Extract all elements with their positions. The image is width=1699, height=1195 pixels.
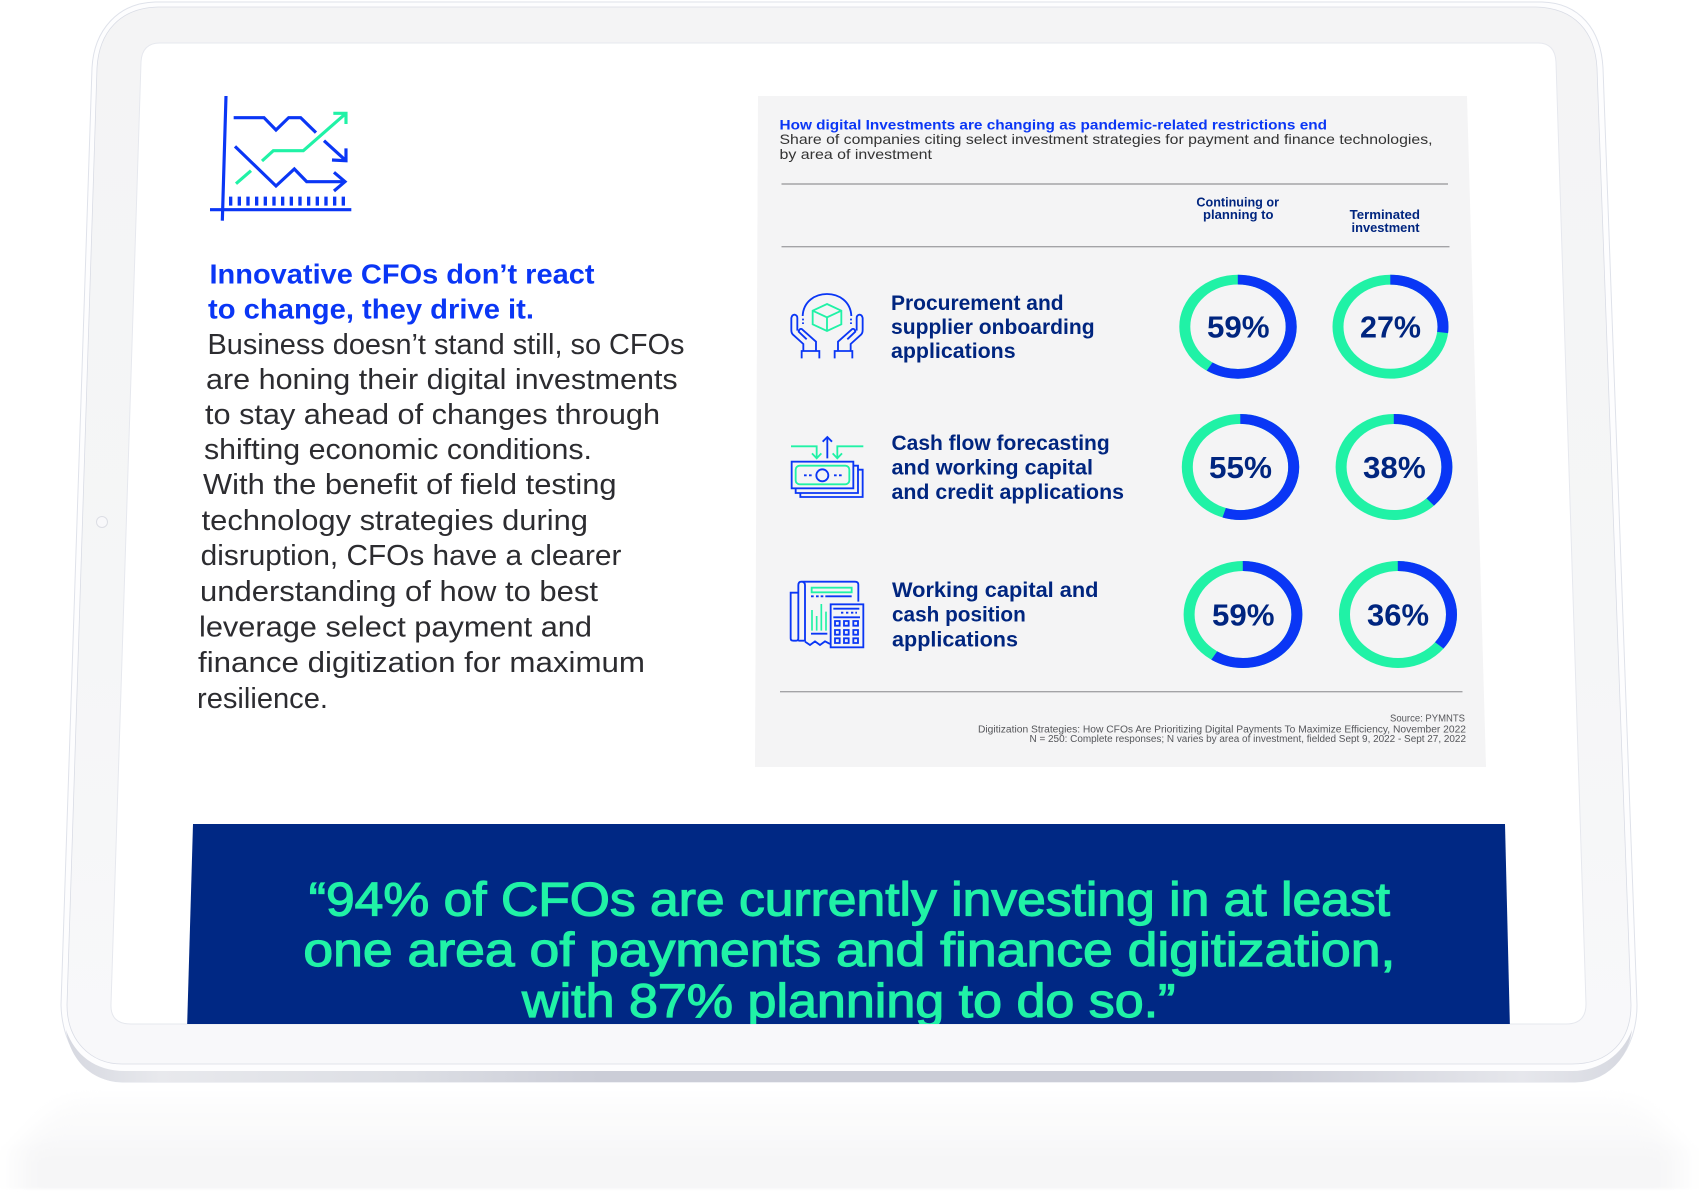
icon: line chart with arrows [210, 96, 351, 221]
body text block: technology strategies during [202, 505, 588, 537]
chart title [780, 116, 1432, 162]
quote text: with 87% planning to do so.” [521, 974, 1176, 1027]
body text block: finance digitization for maximum [198, 647, 645, 679]
callout: quote band [187, 824, 1510, 1030]
donut: 59% continuing working capital: 59% [1212, 598, 1274, 632]
source note: N = 250: Complete responses; N varies by area of investment, fielded Sept 9, 2022 - Sept 27, 2022 [1030, 734, 1466, 745]
chart title: How digital Investments are changing as pandemic-related restrictions end [780, 116, 1327, 132]
row 2 label: and working capital [892, 456, 1093, 479]
column header: terminated: investment [1352, 221, 1420, 235]
donut: 59% continuing procurement [1185, 280, 1291, 374]
column header: continuing: Continuing or [1196, 196, 1279, 210]
source note: Digitization Strategies: How CFOs Are Prioritizing Digital Payments To Maximize Efficiency, November 2022 [978, 724, 1466, 735]
tablet shadow [18, 1085, 1680, 1189]
row 2 label [892, 432, 1124, 504]
row 3 label [892, 579, 1098, 652]
quote text: one area of payments and finance digitization, [303, 923, 1395, 976]
body text block: Business doesn’t stand still, so CFOs [208, 329, 684, 361]
body text block: leverage select payment and [199, 612, 592, 644]
panel: digital investments chart [755, 96, 1486, 767]
column header: continuing [1196, 196, 1279, 222]
body text block: With the benefit of field testing [203, 469, 617, 501]
icon: banknotes with arrows [791, 437, 863, 497]
row 1 label: Procurement and [891, 292, 1064, 315]
source note: Source: PYMNTS [1390, 714, 1465, 725]
chart title: Share of companies citing select investment strategies for payment and finance technologies, [780, 131, 1432, 147]
row 3 label: Working capital and [892, 579, 1098, 602]
chart title: by area of investment [780, 146, 932, 162]
body text block: to stay ahead of changes through [205, 399, 660, 431]
column header: terminated [1350, 208, 1420, 235]
donut: 27% terminated procurement [1338, 280, 1443, 374]
row 2 label: Cash flow forecasting [892, 432, 1110, 455]
donut: 55% continuing cash flow [1187, 419, 1294, 515]
body text block: understanding of how to best [200, 576, 598, 608]
column header: terminated: Terminated [1350, 208, 1420, 222]
body text block [197, 329, 684, 715]
donut: 55% continuing cash flow: 55% [1209, 450, 1272, 485]
donut: 38% terminated cash flow: 38% [1363, 450, 1426, 485]
donut: 38% terminated cash flow [1341, 419, 1447, 515]
donut: 59% continuing working capital [1189, 566, 1297, 663]
heading: Innovative CFOs: to change, they drive it. [208, 294, 534, 324]
row 3 label: cash position [892, 604, 1026, 627]
side button [96, 516, 108, 528]
body text block: shifting economic conditions. [204, 434, 592, 466]
tablet side shading [66, 1030, 1632, 1082]
row 2 label: and credit applications [892, 481, 1124, 504]
quote text [303, 872, 1395, 1027]
row 1 label [891, 292, 1095, 363]
donut: 36% terminated working capital [1344, 566, 1452, 663]
body text block: are honing their digital investments [206, 364, 678, 396]
icon: hands holding box [791, 294, 863, 358]
heading: Innovative CFOs: Innovative CFOs don’t react [210, 258, 594, 290]
row 1 label: supplier onboarding [891, 316, 1095, 339]
body text block: disruption, CFOs have a clearer [201, 540, 622, 572]
icon: ledger and calculator [791, 582, 863, 647]
donut: 59% continuing procurement: 59% [1207, 310, 1270, 344]
tablet screen [111, 43, 1586, 1024]
donut: 27% terminated procurement: 27% [1360, 310, 1421, 344]
source note [978, 714, 1466, 745]
row 1 label: applications [891, 340, 1016, 363]
row 3 label: applications [892, 628, 1018, 652]
donut: 36% terminated working capital: 36% [1367, 598, 1429, 632]
quote text: “94% of CFOs are currently investing in at least [309, 872, 1390, 925]
column header: continuing: planning to [1203, 208, 1274, 222]
heading: Innovative CFOs [208, 258, 594, 324]
panel background [755, 96, 1486, 767]
body text block: resilience. [197, 683, 328, 715]
